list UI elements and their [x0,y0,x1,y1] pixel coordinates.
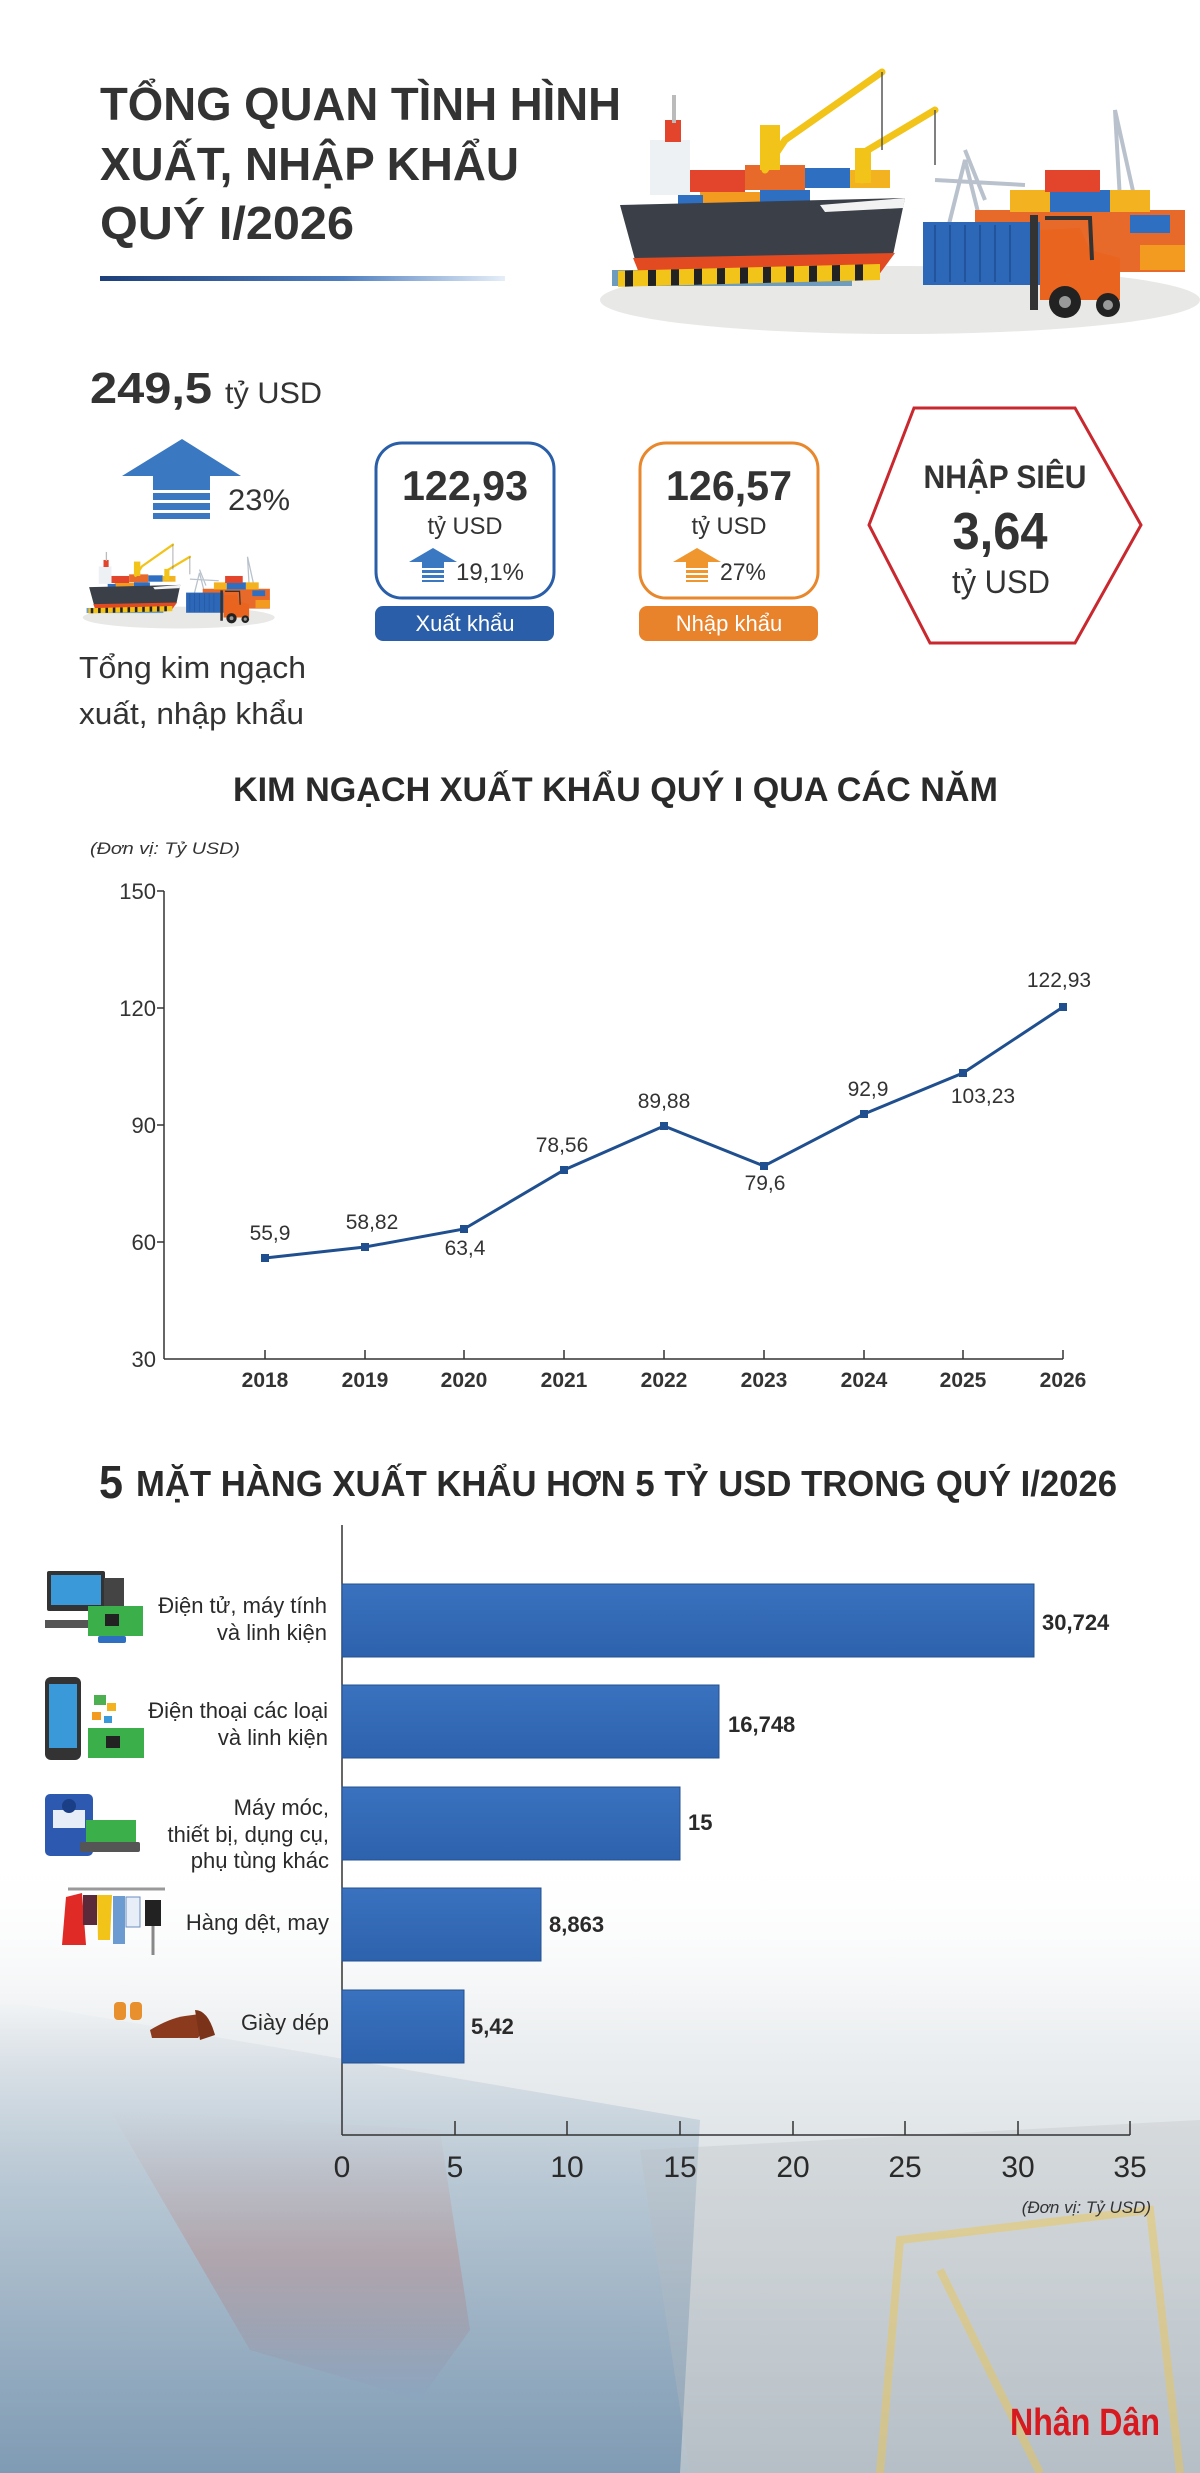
bar chart: top 5 export goods: Máy móc, [234,1795,329,1820]
icon: small port illustration [83,545,275,628]
bar chart: top 5 export goods: Hàng dệt, may [186,1910,329,1935]
line chart: export by year: 2026 [1040,1369,1086,1392]
bar chart: top 5 export goods: 8,863 [549,1912,604,1937]
heading: top 5 exports: MẶT HÀNG XUẤT KHẨU HƠN 5 TỶ USD TRONG QUÝ I/2026 [136,1462,1117,1504]
line chart: export by year: 79,6 [745,1172,785,1195]
line chart: export by year: 2024 [841,1369,888,1392]
bar chart: top 5 export goods: 16,748 [728,1712,795,1737]
line chart: export by year: 2021 [541,1369,588,1392]
bar chart: top 5 export goods: 5,42 [471,2014,514,2039]
illustration: ship and port [600,72,1200,334]
line chart: export by year: 103,23 [951,1085,1015,1108]
bar chart: top 5 export goods: 10 [550,2151,584,2184]
panel: export: Xuất khẩu [415,611,515,636]
panel: export: tỷ USD [428,513,502,540]
bar chart: top 5 export goods: và linh kiện [218,1725,328,1750]
line chart: export by year: (Đơn vị: Tỷ USD) [90,839,240,858]
label: total turnover: Tổng kim ngạch [79,650,306,685]
panel: import: 27% [720,559,766,586]
heading: export over years: KIM NGẠCH XUẤT KHẨU QUÝ I QUA CÁC NĂM [233,771,998,809]
bar chart: top 5 export goods: 5 [447,2151,463,2184]
icon: clothes rack [62,1889,165,1955]
line chart: export by year: 150 [119,879,156,904]
panel: import: tỷ USD [692,513,766,540]
line chart: export by year: 2020 [441,1369,487,1392]
total value: 249,5 [90,364,212,413]
bar chart: top 5 export goods: 0 [334,2151,350,2184]
bar chart: top 5 export goods: phụ tùng khác [191,1848,329,1873]
panel: export: 19,1% [456,559,524,586]
line chart: export by year: 90 [132,1113,156,1138]
line chart: export by year: 122,93 [1027,969,1091,992]
bar chart: top 5 export goods: Giày dép [241,2010,329,2035]
bar chart: top 5 export goods: 30 [1001,2151,1035,2184]
bar chart: top 5 export goods: 15 [688,1810,712,1835]
bar chart: top 5 export goods [148,1525,1151,2217]
line chart: export by year: 2018 [242,1369,289,1392]
panel: trade deficit hexagon: NHẬP SIÊU [924,459,1086,495]
line chart: export by year: 92,9 [848,1078,888,1101]
line chart: export by year [90,839,1091,1392]
line chart: export by year: 2019 [342,1369,388,1392]
label: total turnover: xuất, nhập khẩu [79,696,304,731]
bar chart: top 5 export goods: 30,724 [1042,1610,1110,1635]
line chart: export by year: 78,56 [536,1134,588,1157]
icon: big up arrow 23%: 23% [228,484,290,517]
bar chart: top 5 export goods: 25 [888,2151,922,2184]
line chart: export by year: 30 [132,1347,156,1372]
title: XUẤT, NHẬP KHẨU [100,138,519,190]
title: TỔNG QUAN TÌNH HÌNH [100,78,621,130]
bar chart: top 5 export goods: 35 [1113,2151,1147,2184]
bar chart: top 5 export goods: thiết bị, dụng cụ, [168,1822,329,1847]
title: QUÝ I/2026 [100,197,354,249]
line chart: export by year: 58,82 [346,1211,398,1234]
label: total turnover [79,650,306,731]
bar chart: top 5 export goods: Điện tử, máy tính [158,1593,327,1618]
line chart: export by year: 60 [132,1230,156,1255]
icon: phone [45,1677,144,1760]
panel: import: Nhập khẩu [676,611,782,636]
icon: computer [45,1571,143,1643]
bar chart: top 5 export goods: 15 [663,2151,697,2184]
background: port photo (faded) [0,1850,1200,2473]
logo: Nhân Dân: Nhân Dân [1010,2402,1160,2444]
icon: machine [45,1794,140,1856]
icon: big up arrow 23% [122,439,290,519]
panel: export [375,443,554,641]
bar chart: top 5 export goods: Điện thoại các loại [148,1698,328,1723]
line chart: export by year: 55,9 [250,1222,290,1245]
panel: trade deficit hexagon [869,408,1141,643]
panel: export: 122,93 [402,462,528,509]
heading: top 5 exports: 5 [99,1456,123,1508]
panel: import [639,443,818,641]
line chart: export by year: 120 [119,996,156,1021]
panel: import: 126,57 [666,462,792,509]
line chart: export by year: 2025 [940,1369,987,1392]
title [100,78,621,249]
total value: tỷ USD [225,377,322,410]
bar chart: top 5 export goods: và linh kiện [217,1620,327,1645]
panel: trade deficit hexagon: tỷ USD [952,564,1050,600]
line chart: export by year: 63,4 [445,1237,486,1260]
line chart: export by year: 2022 [641,1369,687,1392]
line chart: export by year: 89,88 [638,1090,690,1113]
panel: trade deficit hexagon: 3,64 [952,503,1048,561]
line chart: export by year: 2023 [741,1369,787,1392]
bar chart: top 5 export goods: 20 [776,2151,810,2184]
total value [90,364,322,413]
bar chart: top 5 export goods: (Đơn vị: Tỷ USD) [1022,2198,1151,2217]
icon: shoes [114,2002,215,2040]
